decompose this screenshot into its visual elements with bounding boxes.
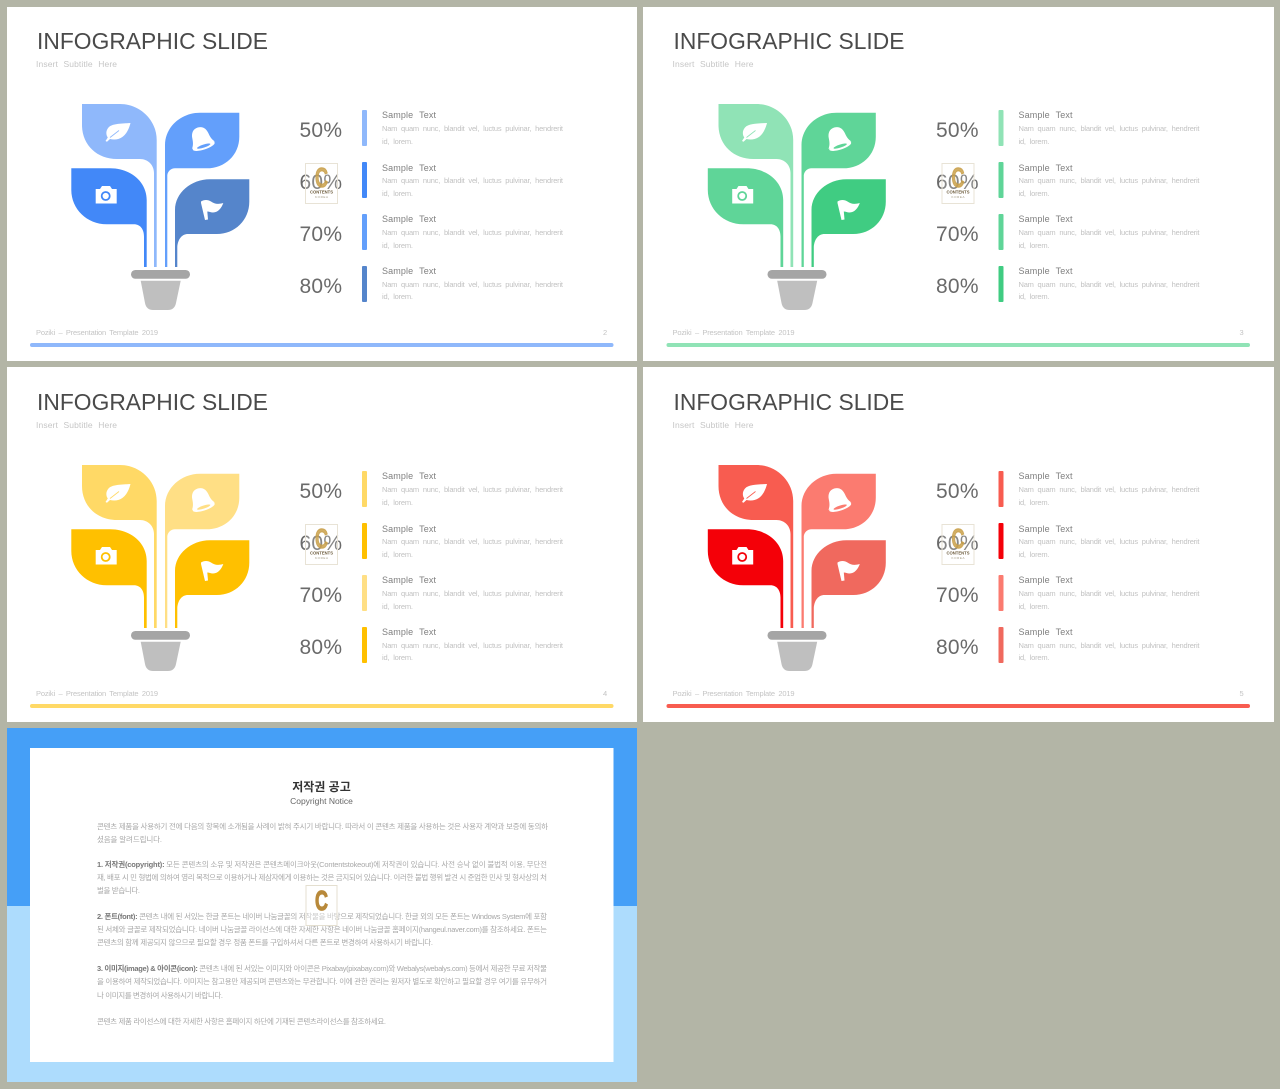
stat row 3: 70% — [300, 223, 342, 246]
intro paragraph: 셨음을 알려드립니다. — [97, 834, 162, 844]
stat row 3: 70% — [936, 584, 978, 607]
stat row 2: id, lorem. — [1018, 550, 1050, 559]
stat row 3 — [300, 214, 564, 250]
footer text: Poziki – Presentation Template 2019 — [36, 689, 158, 698]
stat row 1: Sample Text — [1018, 110, 1073, 120]
stat row 1: Sample Text — [382, 471, 436, 481]
stat row 3: id, lorem. — [382, 602, 413, 611]
icon: flag — [201, 561, 223, 581]
watermark: CONTENTS — [946, 550, 970, 556]
footer text: Poziki – Presentation Template 2019 — [672, 689, 794, 698]
watermark: C — [952, 523, 964, 554]
section 3 image and icon — [97, 963, 547, 1000]
stat row 4: id, lorem. — [382, 653, 413, 662]
stat row 1: id, lorem. — [382, 137, 413, 146]
stat row 1: Nam quam nunc, blandit vel, luctus pulvinar, hendrerit — [382, 124, 564, 133]
watermark: C — [315, 885, 328, 916]
watermark: KOREA — [952, 556, 964, 560]
icon: camera — [96, 547, 117, 564]
icon: camera — [96, 186, 117, 204]
stat row 1: 50% — [300, 119, 342, 142]
stat row 4: 80% — [300, 636, 342, 659]
stat row 4: 80% — [300, 275, 342, 298]
icon: bell — [823, 124, 853, 153]
page number: 2 — [603, 328, 607, 337]
page number: 3 — [1240, 328, 1244, 337]
stat row 1: id, lorem. — [382, 498, 413, 507]
title: INFOGRAPHIC SLIDE — [37, 389, 268, 415]
stat row 4: Sample Text — [1018, 627, 1073, 637]
pot — [777, 281, 817, 310]
stat row 3: Sample Text — [382, 214, 436, 224]
section 3 image and icon: 나 이미지를 변경하여 사용하시기 바랍니다. — [97, 990, 223, 1000]
chart: plant with four leaves — [708, 465, 886, 671]
stat row 1: Nam quam nunc, blandit vel, luctus pulvinar, hendrerit — [1018, 485, 1200, 494]
pot — [141, 642, 181, 671]
stat row 3: id, lorem. — [1018, 602, 1050, 611]
leaf: middle left — [708, 529, 783, 628]
stat row 2: id, lorem. — [382, 550, 413, 559]
stat row 2: 60% — [300, 532, 342, 555]
stat row 1: id, lorem. — [1018, 498, 1050, 507]
title: INFOGRAPHIC SLIDE — [37, 28, 268, 54]
watermark: C — [952, 162, 964, 193]
leaf: middle right — [175, 540, 249, 628]
section 2 font: 2. 폰트(font): 콘텐츠 내에 된 서있는 한글 폰트는 네이버 나눔글꼴의 저작물을 바탕으로 제작되었습니다. 한글 외의 모든 폰트는 Windows System에 포함 — [97, 911, 547, 921]
stat row 3: Nam quam nunc, blandit vel, luctus pulvinar, hendrerit — [382, 589, 564, 598]
stat row 4: Nam quam nunc, blandit vel, luctus pulvinar, hendrerit — [382, 280, 564, 289]
icon: bell — [823, 485, 853, 514]
intro paragraph: 콘텐츠 제품을 사용하기 전에 다음의 항목에 소개됨을 사례이 밝혀 주시기 바랍니다. 따라서 이 콘텐츠 제품을 사용하는 것은 사용자 계약과 보증에 동의하 — [97, 821, 548, 831]
watermark: C — [315, 523, 328, 554]
page number: 5 — [1240, 689, 1244, 698]
stat row 1: Sample Text — [1018, 471, 1073, 481]
stat row 2 — [300, 162, 564, 198]
title: INFOGRAPHIC SLIDE — [674, 28, 904, 54]
stat row 3 — [300, 575, 564, 611]
stat row 3: id, lorem. — [382, 241, 413, 250]
icon: flag — [838, 200, 860, 220]
stat row 2: 60% — [300, 171, 342, 194]
stat row 2 — [936, 523, 1200, 559]
subtitle: Insert Subtitle Here — [36, 420, 117, 430]
stat row 2: 60% — [936, 532, 978, 555]
notice subheading: Copyright Notice — [290, 796, 353, 806]
subtitle: Insert Subtitle Here — [36, 59, 117, 69]
stat row 4: 80% — [936, 275, 978, 298]
stat row 4: id, lorem. — [1018, 292, 1050, 301]
leaf: top right — [165, 113, 239, 267]
stat row 1 — [936, 471, 1200, 507]
section 1 copyright: 벌을 받습니다. — [97, 885, 140, 895]
footer line — [30, 704, 614, 708]
footer line — [30, 343, 614, 347]
section 1 copyright: 1. 저작권(copyright): 모든 콘텐츠의 소유 및 저작권은 콘텐츠메이크아웃(Contentstokeout)에 저작권이 있습니다. 사전 승낙 없이 불법적 이용, 무단전 — [97, 859, 547, 869]
leaf: middle right — [812, 540, 886, 628]
icon: leaf — [106, 484, 130, 503]
icon: bell — [186, 124, 216, 153]
stat row 3: 70% — [300, 584, 342, 607]
pot rim — [768, 631, 826, 640]
stat row 3: Nam quam nunc, blandit vel, luctus pulvinar, hendrerit — [382, 228, 564, 237]
icon: flag — [201, 200, 223, 220]
stat row 1 — [300, 471, 564, 507]
section 2 font: 된 서체와 글꼴로 제작되었습니다. 네이버 나눔글꼴 라이선스에 대한 자세한 사항은 네이버 나눔글꼴 홈페이지(hangeul.naver.com)를 참조하세요. 폰트는 — [97, 924, 547, 934]
stat row 4: id, lorem. — [1018, 653, 1050, 662]
section 1 copyright — [97, 859, 547, 895]
leaf: middle right — [175, 179, 249, 267]
footer line — [666, 343, 1250, 347]
icon: bell — [186, 485, 216, 514]
stat row 4 — [300, 266, 564, 302]
panel: red slide — [643, 367, 1274, 722]
icon: leaf — [742, 123, 767, 142]
pot rim — [131, 270, 190, 279]
page number: 4 — [603, 689, 607, 698]
stat row 4: id, lorem. — [382, 292, 413, 301]
section 3 image and icon: 을 이용하여 제작되었습니다. 이미지는 참고용만 제공되며 콘텐츠와는 무관합니다. 이에 관한 권리는 원저자 별도로 확인하고 필요할 경우 여기를 유무하거 — [97, 976, 547, 986]
leaf: top right — [165, 474, 239, 628]
footer line — [666, 704, 1250, 708]
watermark — [306, 523, 338, 564]
watermark: CONTENTS — [310, 550, 333, 556]
pot rim — [768, 270, 826, 279]
panel: blue slide — [7, 7, 637, 361]
stat row 4: Nam quam nunc, blandit vel, luctus pulvinar, hendrerit — [1018, 641, 1200, 650]
stat row 3: 70% — [936, 223, 978, 246]
leaf: top left — [82, 465, 157, 628]
panel: copyright notice — [7, 728, 637, 1082]
chart: plant with four leaves — [708, 104, 886, 310]
leaf: middle left — [708, 168, 783, 267]
watermark: KOREA — [952, 195, 964, 199]
closing paragraph: 콘텐츠 제품 라이선스에 대한 자세한 사항은 홈페이지 하단에 기재된 콘텐츠라이선스를 참조하세요. — [97, 1016, 386, 1026]
watermark — [942, 162, 974, 204]
stat row 1: id, lorem. — [1018, 137, 1050, 146]
title: INFOGRAPHIC SLIDE — [674, 389, 904, 415]
icon: camera — [732, 186, 753, 204]
stat row 2: Nam quam nunc, blandit vel, luctus pulvinar, hendrerit — [1018, 537, 1200, 546]
stat row 3: Sample Text — [382, 575, 436, 585]
stat row 4 — [300, 627, 564, 663]
stat row 2: id, lorem. — [1018, 189, 1050, 198]
stat row 4: Nam quam nunc, blandit vel, luctus pulvinar, hendrerit — [382, 641, 564, 650]
stat row 4: Nam quam nunc, blandit vel, luctus pulvinar, hendrerit — [1018, 280, 1200, 289]
watermark: CONTENTS — [310, 190, 333, 194]
stat row 1: 50% — [936, 119, 978, 142]
stat row 4: 80% — [936, 636, 978, 659]
leaf: top right — [802, 474, 876, 628]
pot — [141, 281, 181, 310]
chart: plant with four leaves — [71, 465, 249, 671]
stat row 1: 50% — [936, 480, 978, 503]
leaf: middle right — [812, 179, 886, 267]
leaf: top right — [802, 113, 876, 267]
stat row 4 — [936, 627, 1200, 663]
watermark — [942, 523, 974, 564]
section 2 font — [97, 911, 547, 947]
stat row 2 — [300, 523, 564, 559]
stat row 2: Sample Text — [382, 163, 436, 173]
stat row 2: Sample Text — [382, 524, 436, 534]
panel: yellow slide — [7, 367, 637, 722]
stat row 3: Sample Text — [1018, 575, 1073, 585]
intro paragraph — [97, 821, 548, 844]
stat row 2: Nam quam nunc, blandit vel, luctus pulvinar, hendrerit — [382, 176, 564, 185]
stat row 1: 50% — [300, 480, 342, 503]
chart: plant with four leaves — [71, 104, 249, 310]
stat row 2: id, lorem. — [382, 189, 413, 198]
section 2 font: 콘텐츠의 함께 제공되지 않으므로 필요할 경우 정품 폰트를 구입하셔서 다른 폰트로 변경하여 사용하시기 바랍니다. — [97, 937, 433, 947]
stat row 1: Nam quam nunc, blandit vel, luctus pulvinar, hendrerit — [1018, 124, 1200, 133]
stat row 1: Nam quam nunc, blandit vel, luctus pulvinar, hendrerit — [382, 485, 564, 494]
icon: leaf — [106, 123, 130, 142]
watermark: KOREA — [315, 195, 328, 199]
stat row 2: Nam quam nunc, blandit vel, luctus pulvinar, hendrerit — [1018, 176, 1200, 185]
notice heading: 저작권 공고 — [292, 779, 351, 794]
leaf: top left — [718, 104, 793, 267]
section 1 copyright: 재, 배포 시 민 형법에 의하여 영리 목적으로 이용하거나 제삼자에게 이용하는 것은 금지되어 있습니다. 이러한 불법 행위 발견 시 준엄한 민사 및 형사상의 처 — [97, 872, 547, 882]
leaf: middle left — [71, 529, 147, 628]
icon: camera — [732, 547, 753, 564]
stat row 1 — [300, 110, 564, 146]
stat row 3 — [936, 575, 1200, 611]
pot — [777, 642, 817, 671]
watermark — [306, 162, 338, 204]
stat row 3: Sample Text — [1018, 214, 1073, 224]
watermark: CONTENTS — [946, 190, 970, 194]
watermark: C — [315, 162, 328, 193]
stat row 3 — [936, 214, 1200, 250]
subtitle: Insert Subtitle Here — [672, 420, 754, 430]
stat row 4: Sample Text — [1018, 266, 1073, 276]
stat row 4 — [936, 266, 1200, 302]
stat row 2 — [936, 162, 1200, 198]
stat row 2: Sample Text — [1018, 524, 1073, 534]
section 3 image and icon: 3. 이미지(image) & 아이콘(icon): 콘텐츠 내에 된 서있는 이미지와 아이콘은 Pixabay(pixabay.com)와 Webalys(webalys.com) 등에서 제공한 무료 저작물 — [97, 963, 547, 973]
stat row 4: Sample Text — [382, 266, 436, 276]
stat row 2: Nam quam nunc, blandit vel, luctus pulvinar, hendrerit — [382, 537, 564, 546]
leaf: top left — [718, 465, 793, 628]
watermark: KOREA — [315, 556, 328, 560]
stat row 3: id, lorem. — [1018, 241, 1050, 250]
leaf: top left — [82, 104, 157, 267]
footer text: Poziki – Presentation Template 2019 — [672, 328, 794, 337]
stat row 2: 60% — [936, 171, 978, 194]
watermark — [306, 885, 337, 926]
leaf: middle left — [71, 168, 147, 267]
icon: leaf — [742, 484, 767, 503]
stat row 2: Sample Text — [1018, 163, 1073, 173]
footer text: Poziki – Presentation Template 2019 — [36, 328, 158, 337]
subtitle: Insert Subtitle Here — [672, 59, 754, 69]
stat row 3: Nam quam nunc, blandit vel, luctus pulvinar, hendrerit — [1018, 589, 1200, 598]
stat row 4: Sample Text — [382, 627, 436, 637]
stat row 3: Nam quam nunc, blandit vel, luctus pulvinar, hendrerit — [1018, 228, 1200, 237]
stat row 1: Sample Text — [382, 110, 436, 120]
pot rim — [131, 631, 190, 640]
panel: green slide — [643, 7, 1274, 361]
stat row 1 — [936, 110, 1200, 146]
icon: flag — [838, 561, 860, 581]
